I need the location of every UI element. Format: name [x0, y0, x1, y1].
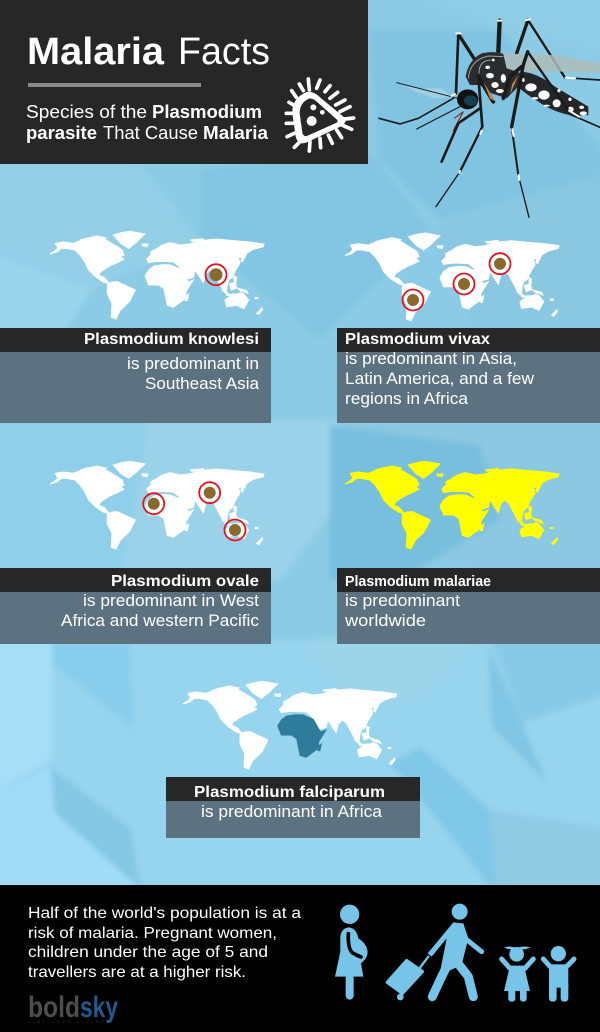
footer text: travellers are at a higher risk. [28, 964, 246, 981]
antennae and palps [379, 82, 463, 131]
panel: malariae: Plasmodium malariae [345, 573, 491, 590]
icon: boy [543, 946, 574, 1002]
logo: boldsky: bold [28, 991, 80, 1024]
abdomen [520, 72, 588, 116]
panel: vivax: Latin America, and a few [345, 370, 534, 388]
panel: malariae: worldwide [344, 612, 426, 630]
footer text: Half of the world's population is at a [28, 905, 301, 922]
footer text [28, 905, 301, 981]
panel: falciparum: Plasmodium falciparum [194, 784, 385, 801]
footer text: children under the age of 5 and [28, 944, 268, 961]
wing [500, 53, 600, 73]
title: Facts [178, 31, 270, 73]
mosquito [379, 19, 600, 217]
subtitle: parasite [26, 123, 97, 143]
panel: ovale: Africa and western Pacific [61, 612, 259, 630]
map: falciparum [183, 681, 397, 769]
panel: falciparum: is predominant in Africa [201, 803, 383, 821]
title rule [28, 83, 201, 87]
panel: ovale: Plasmodium ovale [111, 573, 259, 590]
subtitle: Species of the [26, 102, 147, 122]
panel: knowlesi: is predominant in [127, 355, 259, 373]
panel: falciparum [166, 777, 420, 838]
footer panel [0, 885, 600, 1032]
subtitle: Malaria [203, 123, 269, 143]
thorax [466, 52, 522, 98]
panel: knowlesi: Southeast Asia [145, 375, 260, 393]
subtitle: Plasmodium [152, 102, 262, 122]
map: vivax [345, 233, 559, 321]
title: Malaria [27, 31, 165, 73]
title [27, 31, 270, 73]
header panel [0, 0, 368, 164]
icon: pregnant woman [335, 905, 368, 1000]
white spots [485, 59, 587, 115]
map: ovale [50, 461, 264, 549]
icon: traveller with suitcase [387, 904, 482, 1000]
map: malariae [345, 461, 559, 549]
rear legs [456, 20, 600, 93]
leg bands [452, 19, 579, 180]
logo: boldsky: sky [80, 991, 118, 1024]
subtitle [26, 102, 269, 143]
panel: vivax: Plasmodium vivax [345, 331, 490, 348]
panel: vivax: is predominant in Asia, [345, 350, 517, 368]
panel: ovale [0, 568, 271, 644]
panel: ovale: is predominant in West [83, 592, 259, 610]
coxae [483, 75, 518, 102]
subtitle: That Cause [103, 123, 198, 143]
panel: knowlesi [0, 328, 271, 423]
footer text: risk of malaria. Pregnant women, [28, 925, 277, 942]
logo: boldsky: LIMITLESS LIVING [28, 1020, 104, 1024]
front legs [436, 52, 600, 217]
panel: vivax [337, 328, 600, 423]
panel: knowlesi: Plasmodium knowlesi [84, 331, 259, 348]
panel: malariae [337, 568, 600, 644]
head [457, 89, 478, 109]
panel: malariae: is predominant [345, 592, 460, 610]
icon: girl [502, 946, 533, 1002]
panel: vivax: regions in Africa [345, 390, 469, 408]
icon: parasite [286, 79, 354, 151]
map: knowlesi [50, 231, 264, 319]
